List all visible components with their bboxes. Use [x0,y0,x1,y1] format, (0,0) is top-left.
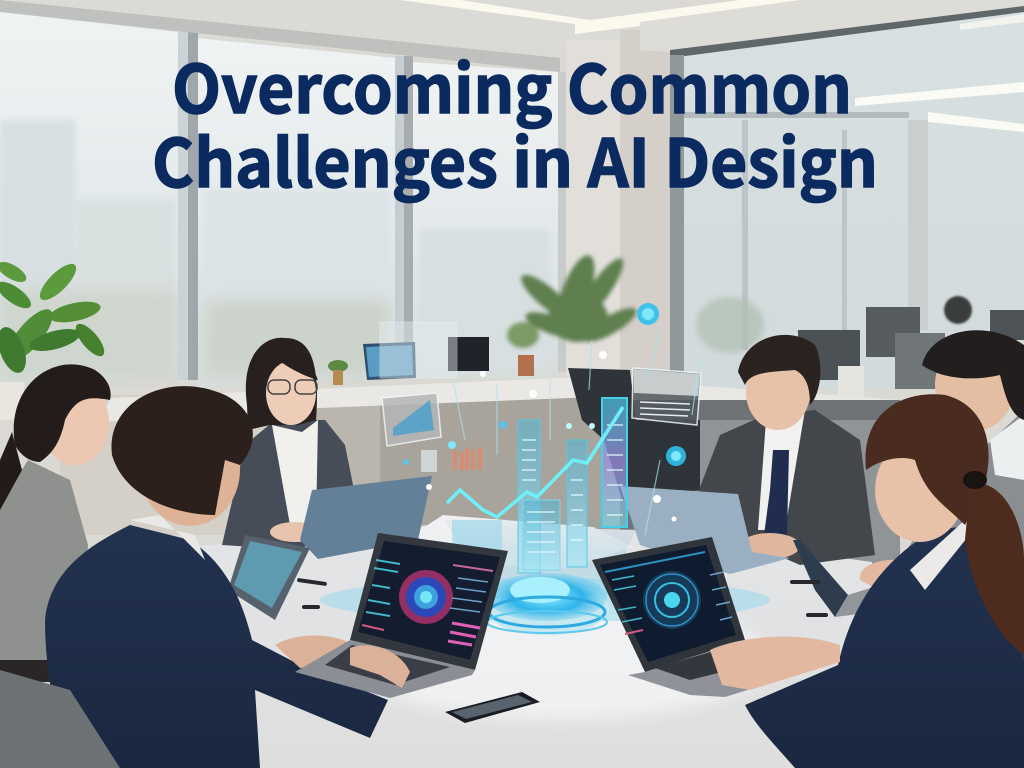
laptop: centre front [295,533,508,698]
person: woman right [710,394,1024,768]
hologram [320,303,770,650]
person: man far right [860,330,1024,588]
windows [0,0,566,390]
chair: front right [975,688,1024,768]
wall column [566,40,620,380]
back wall and desk [60,395,620,535]
laptop: right front [592,537,828,697]
orange bars [455,447,480,470]
ceiling lights [400,0,800,34]
laptop: centre back [300,476,432,559]
thin rays [453,330,700,650]
person: front man [45,386,410,768]
hologram line chart [447,407,623,517]
glass room [640,0,1024,390]
person: woman left [0,364,111,682]
floating chart card [382,393,441,446]
glowing dots [403,303,686,522]
person: man right back [697,335,875,565]
title: Overcoming Common [172,37,852,133]
plant: centre [328,251,764,385]
monitors [363,296,1024,398]
floating text card [632,368,701,425]
pens on table [297,578,828,617]
title: Challenges in AI Design [152,111,878,207]
hologram bars [452,398,627,573]
chair behind hologram [568,368,700,500]
laptop: left small [228,535,310,620]
laptop: right small [793,540,880,617]
table [198,525,885,768]
title [152,37,878,207]
laptop: right back [620,486,790,574]
small list icon [421,450,437,472]
hand on centre laptop [350,645,410,688]
person: woman centre back [222,338,358,550]
phone [445,692,540,723]
chair: front left [0,670,120,768]
plant: left [0,258,109,420]
